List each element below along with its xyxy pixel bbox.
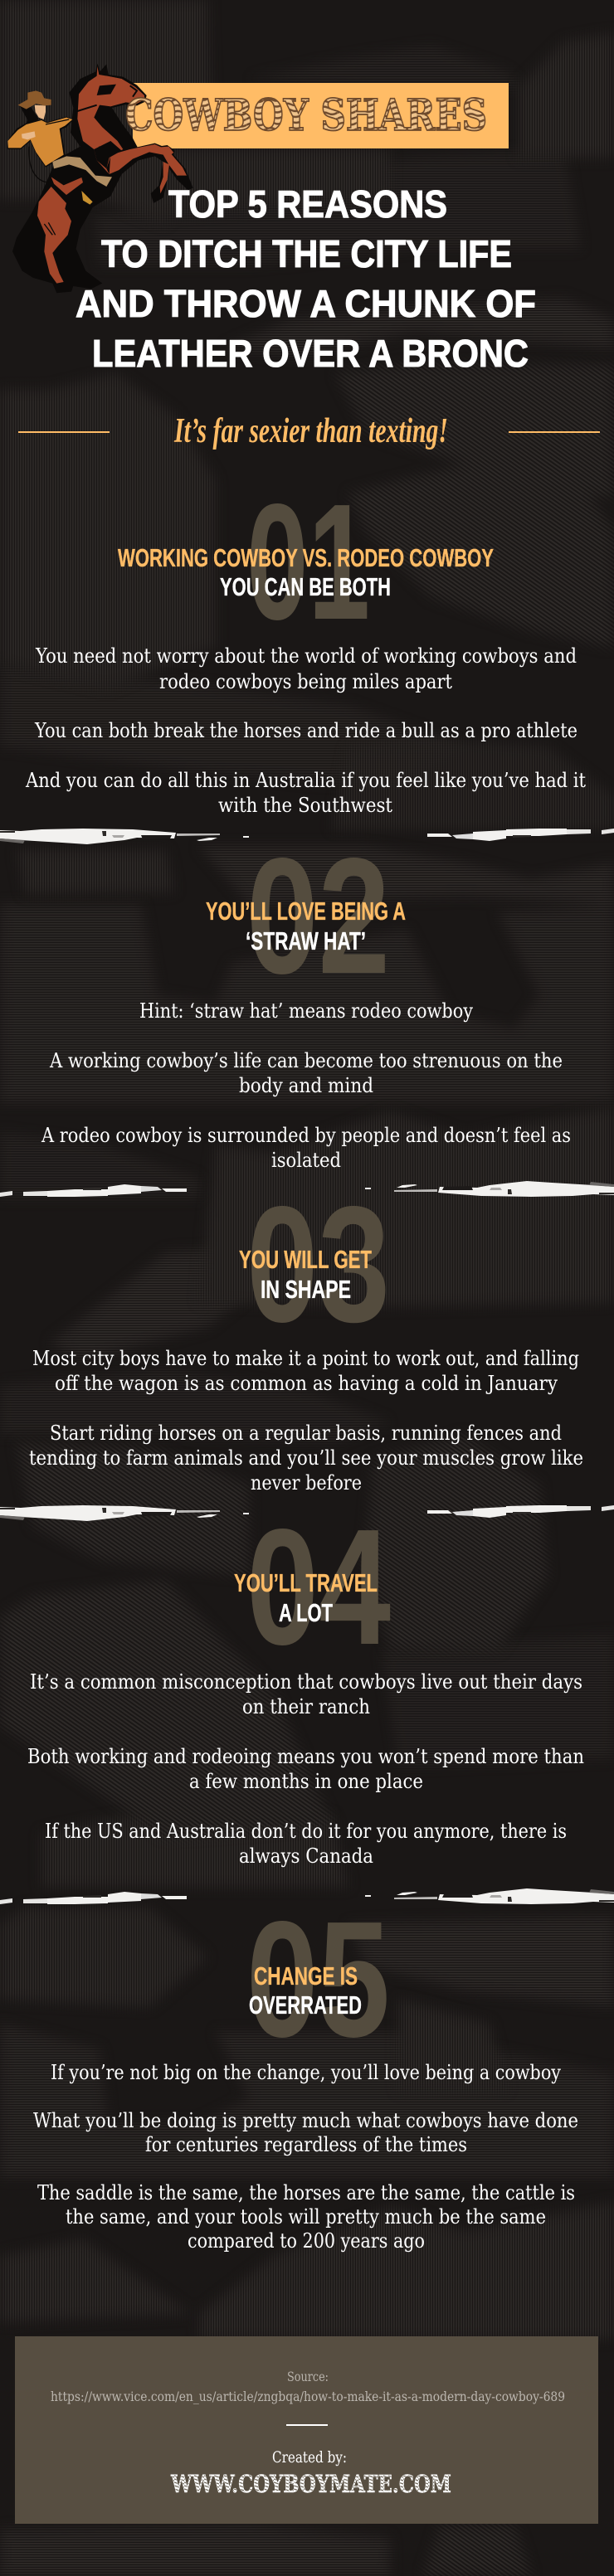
- panel: reason 05: compared to 200 years ago: [188, 2228, 425, 2253]
- title: [76, 182, 536, 375]
- panel: reason 04: YOU’LL TRAVEL: [234, 1568, 378, 1597]
- panel: reason 01: 01: [246, 470, 370, 654]
- divider: brush stroke 2: [0, 1181, 614, 1197]
- panel: footer: [15, 2336, 598, 2524]
- logo banner: [133, 83, 509, 148]
- panel: reason 03: IN SHAPE: [261, 1275, 351, 1304]
- panel: reason 02: isolated: [271, 1148, 341, 1172]
- source label: Source:: [287, 2369, 329, 2384]
- panel: reason 02: YOU’LL LOVE BEING A: [206, 897, 406, 926]
- panel: reason 05: OVERRATED: [249, 1990, 362, 2019]
- icon: cowboy on rearing horse: [7, 64, 193, 293]
- panel: reason 01: [25, 470, 586, 817]
- created by label: Created by:: [272, 2448, 347, 2467]
- panel: reason 05: 05: [246, 1888, 390, 2072]
- panel: reason 05: for centuries regardless of the times: [145, 2132, 467, 2156]
- divider: brush stroke 1: [0, 829, 614, 844]
- panel: reason 01: rodeo cowboys being miles apart: [159, 669, 452, 693]
- panel: reason 02: Hint: ‘straw hat’ means rodeo cowboy: [139, 999, 473, 1023]
- panel: reason 03: [29, 1173, 583, 1495]
- panel: reason 02: ‘STRAW HAT’: [246, 926, 366, 955]
- divider: brush stroke 3: [0, 1505, 614, 1521]
- logo wordmark: COWBOY SHARES: [125, 90, 487, 141]
- divider: brush stroke 4: [0, 1888, 614, 1904]
- title: AND THROW A CHUNK OF: [76, 282, 536, 325]
- panel: reason 05: [33, 1888, 578, 2253]
- panel: reason 03: 03: [246, 1173, 390, 1357]
- panel: reason 04: 04: [246, 1495, 391, 1679]
- panel: reason 04: [27, 1495, 584, 1868]
- panel: reason 02: [41, 824, 571, 1172]
- title: LEATHER OVER A BRONC: [92, 332, 529, 375]
- panel: reason 01: YOU CAN BE BOTH: [220, 572, 391, 601]
- subtitle with rules: It’s far sexier than texting!: [173, 412, 448, 450]
- panel: reason 04: on their ranch: [242, 1694, 370, 1718]
- panel: reason 02: 02: [246, 824, 390, 1009]
- title: TOP 5 REASONS: [168, 182, 447, 226]
- panel: reason 04: a few months in one place: [189, 1769, 423, 1793]
- panel: reason 03: YOU WILL GET: [239, 1245, 372, 1274]
- panel: reason 03: never before: [251, 1470, 362, 1495]
- panel: reason 03: off the wagon is as common as having a cold in January: [55, 1371, 558, 1395]
- panel: reason 04: A LOT: [279, 1598, 333, 1627]
- title: TO DITCH THE CITY LIFE: [101, 232, 512, 275]
- panel: reason 02: body and mind: [239, 1073, 373, 1097]
- panel: reason 04: always Canada: [239, 1844, 373, 1868]
- panel: reason 01: with the Southwest: [218, 793, 392, 817]
- website wordmark: WWW.COYBOYMATE.COM: [170, 2470, 451, 2498]
- panel: reason 05: CHANGE IS: [254, 1961, 358, 1990]
- panel: reason 05: the same, and your tools will pretty much be the same: [66, 2204, 546, 2228]
